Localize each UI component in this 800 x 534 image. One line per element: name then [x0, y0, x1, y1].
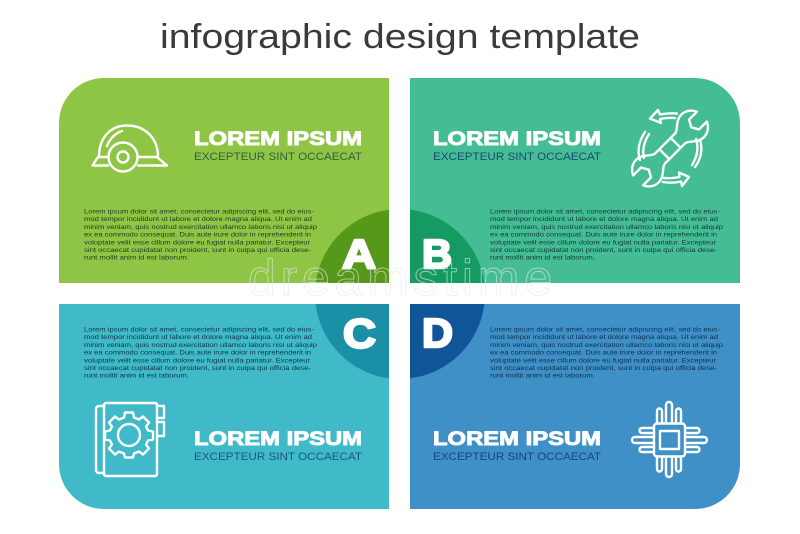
- title: infographic design template: [160, 18, 640, 56]
- body text C: runt mollit anim id est laborum.: [84, 373, 189, 380]
- badge letter D: D: [422, 310, 453, 356]
- icon: wrench with arrows: [627, 105, 713, 192]
- body text C: Lorem ipsum dolor sit amet, consectetur adipiscing elit, sed do eius-: [84, 326, 314, 334]
- body text D: minim veniam, quis nostrud exercitation ullamco laboris nisi ut aliquip: [490, 342, 723, 349]
- body text B: Lorem ipsum dolor sit amet, consectetur adipiscing elit, sed do eius-: [490, 208, 720, 216]
- heading B: LOREM IPSUM: [433, 128, 601, 150]
- panel: D: [410, 304, 740, 509]
- body text A: sint occaecat cupidatat non proident, sunt in culpa qui officia dese-: [84, 247, 311, 254]
- body text A: minim veniam, quis nostrud exercitation ullamco laboris nisi ut aliquip: [84, 224, 317, 231]
- body text B: minim veniam, quis nostrud exercitation ullamco laboris nisi ut aliquip: [490, 224, 723, 231]
- subheading B: EXCEPTEUR SINT OCCAECAT: [433, 151, 601, 163]
- icon: microchip: [632, 402, 707, 477]
- badge letter B: B: [422, 231, 452, 277]
- badge letter C: C: [343, 310, 376, 356]
- badge circle D: [410, 304, 484, 378]
- body text C: ex ea commodo consequat. Duis aute irure dolor in reprehenderit in: [84, 350, 311, 357]
- body text C: mod tempor incididunt ut labore et dolore magna aliqua. Ut enim ad: [84, 334, 312, 341]
- body text B: runt mollit anim id est laborum.: [490, 255, 595, 262]
- body text A: Lorem ipsum dolor sit amet, consectetur adipiscing elit, sed do eius-: [84, 208, 314, 216]
- icon: hard hat: [92, 126, 167, 172]
- badge circle C: [316, 304, 389, 378]
- heading A: LOREM IPSUM: [194, 128, 362, 150]
- body text C: sint occaecat cupidatat non proident, sunt in culpa qui officia dese-: [84, 365, 311, 372]
- badge circle A: [316, 210, 389, 283]
- panel background C: [59, 304, 389, 509]
- body text B: mod tempor incididunt ut labore et dolore magna aliqua. Ut enim ad: [490, 216, 718, 223]
- badge circle B: [410, 210, 484, 283]
- panel background D: [410, 304, 740, 509]
- panel: B: [410, 78, 740, 283]
- panel: A: [59, 78, 389, 283]
- body text C: [84, 326, 317, 380]
- body text B: [490, 208, 723, 262]
- body text D: runt mollit anim id est laborum.: [490, 373, 595, 380]
- body text A: runt mollit anim id est laborum.: [84, 255, 189, 262]
- body text B: ex ea commodo consequat. Duis aute irure dolor in reprehenderit in: [490, 232, 717, 239]
- badge letter A: A: [342, 231, 376, 277]
- watermark: dreamstime: [248, 250, 552, 306]
- body text D: voluptate velit esse cillum dolore eu fugiat nulla pariatur. Excepteur: [490, 357, 717, 364]
- body text D: ex ea commodo consequat. Duis aute irure dolor in reprehenderit in: [490, 350, 717, 357]
- heading C: LOREM IPSUM: [194, 428, 362, 450]
- icon: book with gear: [96, 403, 164, 476]
- body text D: sint occaecat cupidatat non proident, sunt in culpa qui officia dese-: [490, 365, 717, 372]
- body text D: Lorem ipsum dolor sit amet, consectetur adipiscing elit, sed do eius-: [490, 326, 720, 334]
- body text D: mod tempor incididunt ut labore et dolore magna aliqua. Ut enim ad: [490, 334, 718, 341]
- body text B: voluptate velit esse cillum dolore eu fugiat nulla pariatur. Excepteur: [490, 239, 717, 246]
- body text C: minim veniam, quis nostrud exercitation ullamco laboris nisi ut aliquip: [84, 342, 317, 349]
- body text B: sint occaecat cupidatat non proident, sunt in culpa qui officia dese-: [490, 247, 717, 254]
- body text A: ex ea commodo consequat. Duis aute irure dolor in reprehenderit in: [84, 232, 311, 239]
- body text A: [84, 208, 317, 262]
- subheading A: EXCEPTEUR SINT OCCAECAT: [194, 151, 362, 163]
- panel: C: [59, 304, 389, 509]
- body text A: voluptate velit esse cillum dolore eu fugiat nulla pariatur. Excepteur: [84, 239, 311, 246]
- body text A: mod tempor incididunt ut labore et dolore magna aliqua. Ut enim ad: [84, 216, 312, 223]
- subheading D: EXCEPTEUR SINT OCCAECAT: [433, 451, 601, 463]
- panel background B: [410, 78, 740, 283]
- body text C: voluptate velit esse cillum dolore eu fugiat nulla pariatur. Excepteur: [84, 357, 311, 364]
- panel background A: [59, 78, 389, 283]
- subheading C: EXCEPTEUR SINT OCCAECAT: [194, 451, 362, 463]
- heading D: LOREM IPSUM: [433, 428, 601, 450]
- body text D: [490, 326, 723, 380]
